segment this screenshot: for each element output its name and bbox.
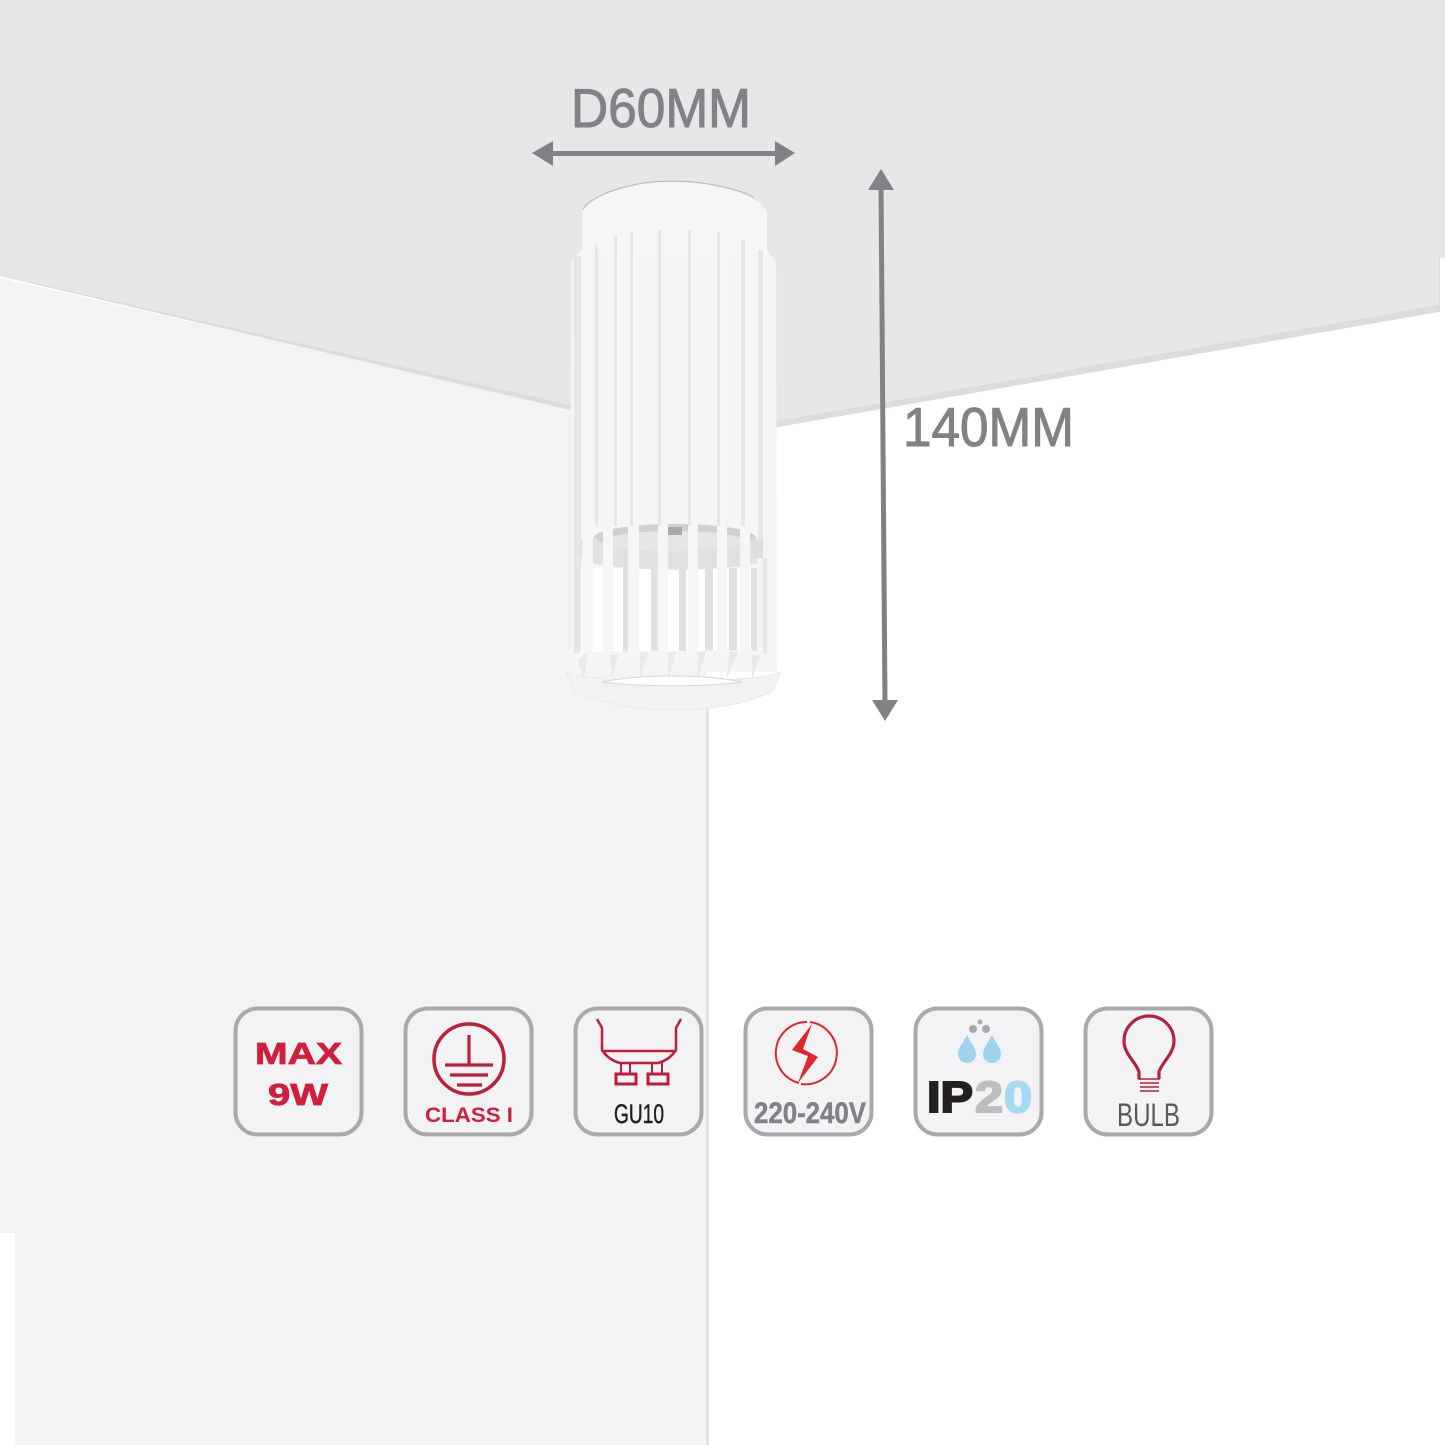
icon: class I earth: CLASS I [425,1104,513,1127]
height dimension arrow [868,169,898,721]
bottom facets [566,650,778,672]
icon: IP20: IP [927,1073,973,1122]
label: diameter: D60MM [571,77,751,139]
icon: IP20: 0 [1004,1073,1032,1122]
icon: voltage [746,1008,872,1134]
icon: bulb [1086,1008,1212,1134]
icon: max 9W [236,1008,362,1134]
icon: bulb: BULB [1117,1097,1180,1133]
icon: max 9W: MAX [255,1036,342,1071]
ceiling light fixture [566,181,780,710]
icon: IP20: 2 [975,1073,1003,1122]
icon: IP20 [916,1008,1042,1134]
width dimension arrow [532,141,795,166]
slats [582,230,750,656]
lower window [580,568,752,652]
icon: GU10 base [576,1008,702,1134]
icon: max 9W: 9W [268,1077,329,1112]
bulb ring [593,526,757,570]
label: height: 140MM [903,396,1074,458]
left wall [0,278,709,1445]
slat shadows [574,230,767,658]
top cap [582,182,767,256]
icon: GU10 base: GU10 [614,1099,664,1129]
icon: voltage: 220-240V [754,1097,866,1130]
fixture body [570,250,777,670]
ceiling [0,0,1445,427]
icon: class I earth [406,1008,532,1134]
bottom rim [566,672,780,710]
